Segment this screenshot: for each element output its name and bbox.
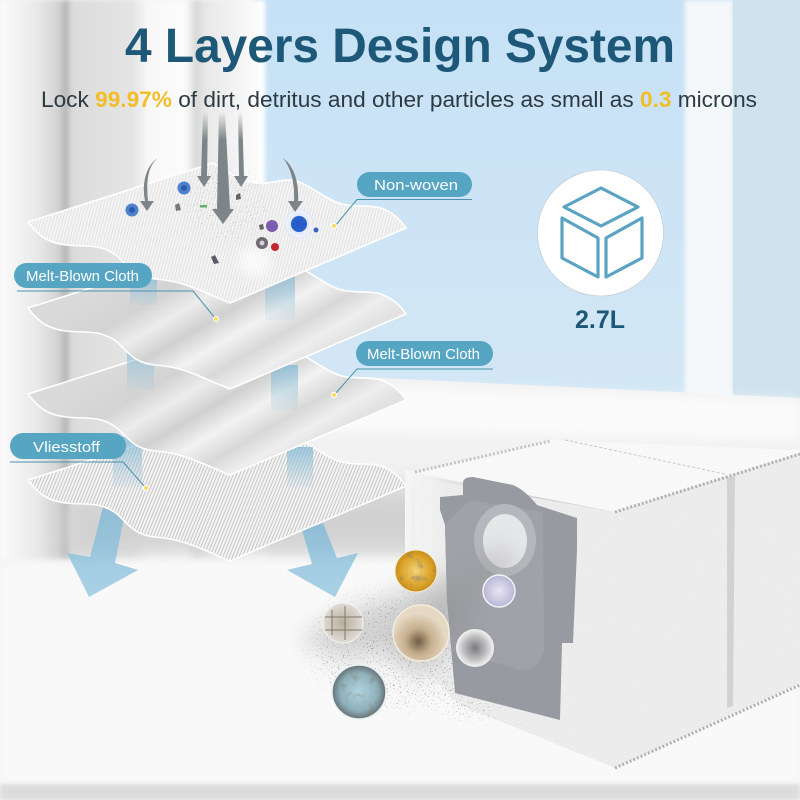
airflow columns onto layer 2 — [130, 272, 295, 320]
label: Melt-Blown Cloth 1 — [14, 263, 219, 322]
dust on top layer — [175, 160, 275, 250]
arrow: left flow down — [67, 507, 138, 597]
label: Melt-Blown Cloth 2: Melt-Blown Cloth — [367, 346, 480, 363]
window dust — [323, 603, 363, 643]
label: Vliesstoff: Vliesstoff — [33, 439, 101, 456]
teal crystals — [332, 665, 386, 719]
arrow: right flow down — [287, 523, 358, 597]
gold debris — [395, 550, 437, 592]
debris circles — [323, 550, 515, 719]
airflow columns onto layer 3 — [127, 345, 298, 410]
label: Melt-Blown Cloth 2 — [331, 341, 493, 398]
bag gray plastic panel — [440, 477, 577, 720]
dust cloud — [295, 545, 530, 730]
label: Melt-Blown Cloth 1: Melt-Blown Cloth — [26, 268, 139, 285]
hair and fluff — [456, 629, 494, 667]
title: 4 Layers Design System — [125, 20, 675, 73]
layer 2: melt-blown sheet — [28, 249, 406, 389]
airflow columns onto layer 4 — [113, 437, 313, 487]
tan soil — [393, 605, 449, 661]
gray arrows falling into filter — [140, 112, 303, 224]
label: Non-woven: Non-woven — [374, 177, 458, 194]
layer 1: non-woven sheet — [28, 163, 406, 303]
label: Non-woven — [331, 172, 472, 229]
label: Vliesstoff — [10, 433, 149, 491]
bag body — [405, 440, 800, 768]
capacity value: 2.7L — [575, 306, 625, 334]
subtitle: Lock 99.97% of dirt, detritus and other particles as small as 0.3 microns — [41, 87, 757, 112]
lavender fibres — [483, 575, 515, 607]
layer 3: melt-blown sheet — [28, 335, 406, 475]
layer 4: Vliesstoff sheet — [28, 421, 406, 561]
capacity icon: cube in white circle — [538, 170, 664, 296]
particles on top layer — [126, 182, 318, 264]
